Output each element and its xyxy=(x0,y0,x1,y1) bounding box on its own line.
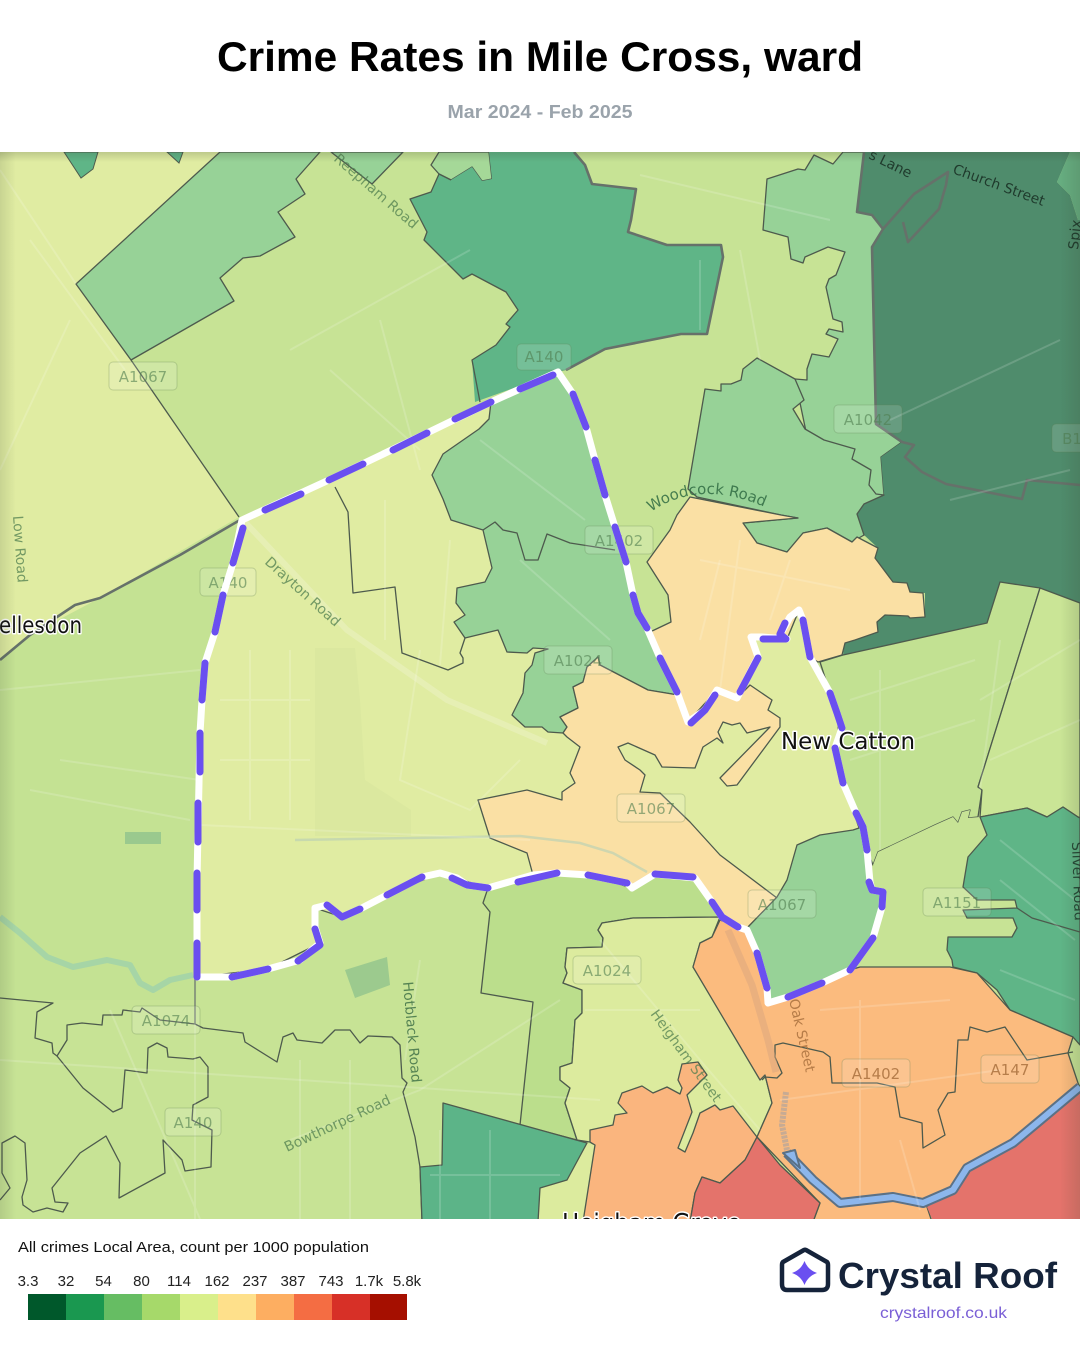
legend scale labels: 80 xyxy=(133,1273,150,1290)
road shield labels: A140 xyxy=(525,348,563,366)
road shield labels: A1402 xyxy=(852,1065,900,1083)
road shield labels: A147 xyxy=(991,1061,1029,1079)
boundaries: south-west wiggly lines xyxy=(0,978,422,1219)
boundary: A1067 line xyxy=(131,360,239,517)
logo: Crystal Roof xyxy=(782,1250,1058,1322)
region: north-west green area xyxy=(76,152,320,360)
road shield labels: A1042 xyxy=(844,411,892,429)
river: west channel xyxy=(0,917,193,990)
legend scale labels: 3.3 xyxy=(18,1273,38,1290)
region: Hotblack Road middle area xyxy=(481,874,720,1140)
legend scale labels: 32 xyxy=(58,1273,74,1290)
street name labels xyxy=(13,152,1080,1152)
road shield labels: A1067 xyxy=(758,896,806,914)
website url: crystalroof.co.uk xyxy=(880,1305,1008,1322)
region: north-east light green block xyxy=(763,152,902,540)
road shield labels: A1074 xyxy=(142,1012,190,1030)
region: east dark green area xyxy=(947,807,1080,1045)
region: Reepham wedge xyxy=(331,152,403,184)
region: strip east of ward south of A1402 xyxy=(622,500,671,632)
park patches xyxy=(125,832,390,998)
region: top-right green patch xyxy=(1057,152,1080,220)
boundary: east dark green internal line xyxy=(1017,908,1080,932)
street name labels: Heigham Street xyxy=(647,1007,725,1106)
legend scale labels: 5.8k xyxy=(393,1273,422,1290)
subtitle: date range: Mar 2024 - Feb 2025 xyxy=(448,102,632,122)
place labels xyxy=(0,613,915,1239)
region: far west pale area xyxy=(0,152,239,658)
legend scale labels: 114 xyxy=(167,1273,191,1290)
street name labels: Church Street xyxy=(951,162,1047,210)
legend scale labels: 237 xyxy=(242,1273,268,1290)
boundary: thick grey lines in dark area xyxy=(857,152,1080,499)
railway in ward xyxy=(295,836,647,872)
road shield labels: A140 xyxy=(174,1114,212,1132)
icon: house with star xyxy=(782,1250,828,1290)
inner orange boundary lines xyxy=(762,1027,1073,1148)
legend scale labels xyxy=(18,1273,422,1290)
place labels: Heigham Grove xyxy=(562,1209,741,1239)
region: south dark green area xyxy=(420,1103,587,1222)
logo wordmark: Crystal Roof xyxy=(838,1255,1058,1296)
region: red central area xyxy=(690,1137,820,1222)
region: very dark north-east area xyxy=(843,152,1080,655)
legend scale labels: 162 xyxy=(204,1273,230,1290)
road shield labels: A140 xyxy=(209,574,247,592)
road shield labels: A1024 xyxy=(554,652,602,670)
legend scale labels: 743 xyxy=(318,1273,344,1290)
river Wensum xyxy=(783,1087,1080,1203)
street name labels: Low Road xyxy=(9,515,30,583)
street name labels: Drayton Road xyxy=(261,554,343,630)
legend title: All crimes Local Area, count per 1000 population xyxy=(18,1239,369,1256)
road shield labels: A1024 xyxy=(583,962,631,980)
local road network xyxy=(0,170,1080,1219)
region: pale area beside south orange xyxy=(538,1143,595,1220)
region: east light green block xyxy=(820,582,1040,865)
region: far east light green block xyxy=(978,588,1080,818)
street name labels: Oak Street xyxy=(785,997,818,1074)
road shield labels: A1151 xyxy=(933,894,981,912)
street name labels: s Lane xyxy=(866,147,914,182)
region: central tan area xyxy=(478,657,780,928)
legend colour bar xyxy=(28,1294,407,1320)
region: Mile Cross south-east green area xyxy=(748,826,883,1003)
boundary: west thick grey line xyxy=(0,520,240,660)
boundary: A140 north outline xyxy=(566,152,723,370)
street name labels: Reepham Road xyxy=(330,151,421,232)
region: south orange area xyxy=(583,1062,757,1222)
region: A140 north green area xyxy=(410,152,723,402)
region: New Catton tan area xyxy=(647,497,925,722)
roads: Oak Street dual carriageway xyxy=(728,930,787,1150)
street name labels: Bowthorpe Road xyxy=(282,1092,393,1156)
map edge shading xyxy=(0,152,1080,1219)
Mile Cross ward boundary xyxy=(197,372,883,1003)
region: top fragments xyxy=(64,152,183,178)
region: north patch xyxy=(431,152,492,181)
region: city centre orange area xyxy=(693,920,1080,1222)
region: east strip below New Catton xyxy=(873,810,980,866)
region: A1024 pale area xyxy=(560,917,772,1175)
region: Mile Cross central green area xyxy=(432,372,678,733)
legend scale labels: 54 xyxy=(95,1273,112,1290)
road shield labels: A1067 xyxy=(119,368,167,386)
road shield labels: A1067 xyxy=(627,800,675,818)
place labels: ellesdon xyxy=(0,613,82,639)
region: Mile Cross playing field patch xyxy=(315,648,411,836)
legend scale labels: 387 xyxy=(280,1273,306,1290)
legend xyxy=(18,1239,422,1320)
boundary: A140 north west edge xyxy=(410,174,518,402)
street name labels: Hotblack Road xyxy=(399,981,424,1083)
region: red east area xyxy=(927,1087,1080,1219)
place labels: New Catton xyxy=(781,729,915,755)
title: Crime Rates in Mile Cross, ward xyxy=(217,33,863,80)
legend scale labels: 1.7k xyxy=(355,1273,384,1290)
road shield labels xyxy=(109,344,1080,1136)
region: Woodcock Road green area xyxy=(688,358,884,552)
boundary: central green divider xyxy=(483,522,615,560)
road shield labels: A1402 xyxy=(595,532,643,550)
street name labels: Woodcock Road xyxy=(646,482,767,510)
region: west green area xyxy=(0,520,240,1000)
region: Mile Cross main ward pale area xyxy=(197,372,870,977)
boundary: internal ward line xyxy=(335,487,465,670)
